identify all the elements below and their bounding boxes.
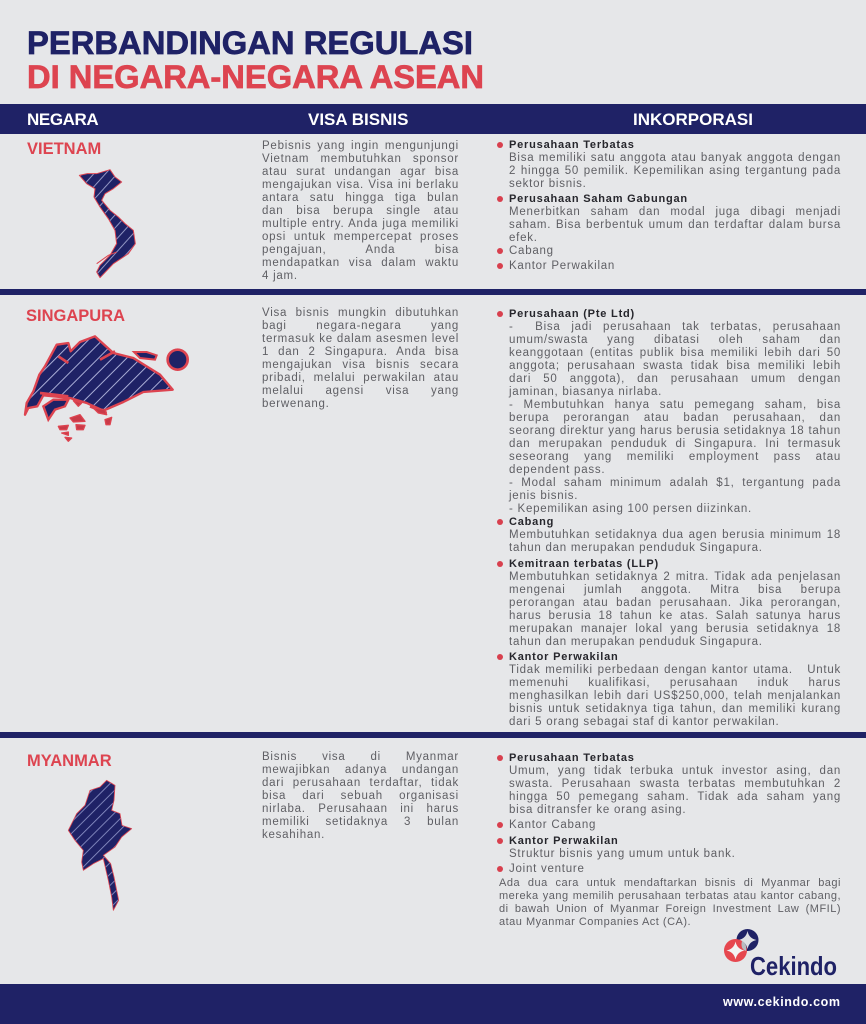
text: Singapore incorporation: - Membutuhkan hanya satu pemegang saham, bisa (509, 399, 841, 411)
text: Singapore incorporation: dependent pass. (509, 464, 605, 476)
text: Vietnam incorporation: Menerbitkan saham dan modal juga dibagi menjadi (509, 206, 841, 218)
panel: Singapura (24, 307, 841, 728)
divider bar (0, 732, 866, 738)
text: Singapore business visa: melalui agensi visa yang (262, 385, 459, 397)
text: Singapore incorporation: - Bisa jadi perusahaan tak terbatas, perusahaan (509, 321, 841, 333)
text: Vietnam business visa: Pebisnis yang ingin mengunjungi (262, 140, 459, 152)
text: Singapore incorporation: Kantor Perwakilan (509, 651, 619, 663)
icon: map of Singapore (24, 335, 189, 442)
text: Vietnam business visa: mendapatkan visa dalam waktu (262, 257, 459, 269)
text: Vietnam incorporation: efek. (509, 232, 538, 244)
text: Singapore business visa: Visa bisnis mungkin dibutuhkan (262, 307, 459, 319)
country name: Singapura: SINGAPURA (26, 307, 125, 325)
text: Vietnam business visa: dan bisa berupa single atau (262, 205, 459, 217)
text: Myanmar incorporation: Umum, yang tidak terbuka untuk investor asing, dan (509, 765, 841, 777)
text: Singapore incorporation: Perusahaan (Pte Ltd) (509, 308, 635, 320)
text: Singapore incorporation: Membutuhkan setidaknya 2 mitra. Tidak ada penjelasan (509, 571, 841, 583)
text: Myanmar business visa: bisa dari sebuah organisasi (262, 790, 459, 802)
text: Singapore incorporation: menghasilkan lebih dari US$250,000, telah menjalankan (509, 690, 841, 702)
text: Vietnam business visa: Vietnam membutuhkan sponsor (262, 153, 459, 165)
text: Singapore incorporation: harus berusia 18 tahun ke atas. Salah satunya harus (509, 610, 841, 622)
text: Myanmar registration note: Ada dua cara untuk mendaftarkan bisnis di Myanmar bagi (499, 877, 841, 889)
text: Myanmar incorporation: bisa ditransfer ke orang asing. (509, 804, 686, 816)
icon: interlocking rings (724, 929, 758, 962)
text: Singapore incorporation: memenuhi kualifikasi, perusahaan induk harus (509, 677, 841, 689)
text: Singapore incorporation: dari 5 orang sebagai staf di kantor perwakilan. (509, 716, 780, 728)
text: Singapore incorporation: keanggotaan (entitas publik bisa memiliki lebih dari 50 (509, 347, 841, 359)
text: Vietnam incorporation: Perusahaan Saham Gabungan (509, 193, 688, 205)
text: Vietnam business visa: multiple entry. Anda juga memiliki (262, 218, 459, 230)
text: Singapore incorporation: berupa perorangan atau badan perusahaan, dan (509, 412, 841, 424)
panel: Vietnam (27, 139, 841, 282)
text: Myanmar incorporation: Kantor Perwakilan (509, 835, 619, 847)
text: Vietnam incorporation: Perusahaan Terbatas (509, 139, 635, 151)
text: Myanmar registration note (499, 877, 841, 928)
text: Myanmar business visa: nirlaba. Perusahaan ini harus (262, 803, 459, 815)
text: Vietnam business visa (262, 140, 459, 282)
text: Vietnam incorporation: saham. Bisa berbentuk umum dan terdaftar dalam bursa (509, 219, 841, 231)
text: Singapore incorporation: tahun dan merupakan penduduk Singapura. (509, 636, 763, 648)
text: Singapore incorporation: Cabang (509, 516, 554, 528)
column heading: negara: NEGARA (27, 110, 98, 129)
text: Myanmar business visa: memiliki setidaknya 3 bulan (262, 816, 459, 828)
text: Myanmar business visa: mewajibkan adanya undangan (262, 764, 459, 776)
text: Vietnam incorporation: Kantor Perwakilan (509, 260, 615, 272)
icon: map of Myanmar (68, 780, 132, 911)
text: Singapore business visa: 1 dan 2 Singapura. Anda bisa (262, 346, 459, 358)
text: Myanmar registration note: mereka yang memilih perusahaan terbatas atau kantor cabang, (499, 890, 841, 902)
panel: Myanmar (27, 751, 841, 928)
text: Singapore incorporation: dari 50 anggota), dan perusahaan umum dengan (509, 373, 841, 385)
text: Myanmar registration note: atau Myanmar Companies Act (CA). (499, 916, 691, 928)
text: Singapore incorporation: Kemitraan terbatas (LLP) (509, 558, 659, 570)
text: Vietnam business visa: opsi untuk mempercepat proses (262, 231, 459, 243)
text: Myanmar business visa: kesahihan. (262, 829, 325, 841)
column heading: inkorporasi: INKORPORASI (633, 110, 753, 129)
text: Singapore incorporation (497, 308, 841, 728)
text: Vietnam incorporation (497, 139, 841, 272)
text: Myanmar incorporation: Struktur bisnis yang umum untuk bank. (509, 848, 736, 860)
text: Singapore incorporation: seseorang yang memiliki employment pass atau (509, 451, 841, 463)
text: Vietnam business visa: mengajukan visa. Visa ini berlaku (262, 179, 459, 191)
country name: Vietnam: VIETNAM (27, 140, 101, 158)
text: Singapore incorporation: mengenai jumlah anggota. Mitra bisa berupa (509, 584, 841, 596)
text: Myanmar incorporation: Joint venture (509, 863, 585, 875)
text: Singapore incorporation: tahun dan merupakan penduduk Singapura. (509, 542, 763, 554)
text: Singapore incorporation: Membutuhkan setidaknya dua agen berusia minimum 18 (509, 529, 841, 541)
text: Singapore incorporation: - Modal saham minimum adalah $1, tergantung pada (509, 477, 841, 489)
text: Vietnam business visa: atau surat undangan agar bisa (262, 166, 459, 178)
text: Vietnam business visa: pengajuan, Anda bisa (262, 244, 459, 256)
text: Vietnam incorporation: sektor bisnis. (509, 178, 587, 190)
text: Singapore business visa: termasuk ke dalam asesmen level (262, 333, 459, 345)
text: Singapore incorporation: umum/swasta yang dibatasi oleh saham dan (509, 334, 841, 346)
text: Myanmar incorporation: Perusahaan Terbatas (509, 752, 635, 764)
text: Myanmar incorporation: swasta. Perusahaan swasta terbatas membutuhkan 2 (509, 778, 841, 790)
text: Myanmar registration note: di bawah Union of Myanmar Foreign Investment Law (MFIL) (499, 903, 841, 915)
country name: Myanmar: MYANMAR (27, 752, 112, 770)
text: Singapore incorporation: dan merupakan penduduk di Singapura. Ini termasuk (509, 438, 841, 450)
text: Vietnam business visa: 4 jam. (262, 270, 298, 282)
text: Singapore incorporation: jenis bisnis. (509, 490, 578, 502)
text: Singapore incorporation: - Kepemilikan asing 100 persen diizinkan. (509, 503, 752, 515)
text: Vietnam incorporation: 2 hingga 50 pemilik. Kepemilikan asing tergantung pada (509, 165, 841, 177)
icon: map of Vietnam (78, 169, 136, 278)
text: Singapore business visa: berwenang. (262, 398, 330, 410)
text: Myanmar business visa: Bisnis visa di Myanmar (262, 751, 459, 763)
title (27, 25, 484, 95)
footer bar (0, 984, 866, 1024)
text: Singapore incorporation: jaminan, biasanya nirlaba. (509, 386, 662, 398)
divider bar (0, 289, 866, 295)
text: Singapore incorporation: bisnis untuk setidaknya tiga tahun, dan memiliki kurang (509, 703, 841, 715)
text: Myanmar incorporation: Kantor Cabang (509, 819, 596, 831)
text: Singapore business visa: mengajukan visa bisnis secara (262, 359, 459, 371)
text: Myanmar incorporation: hingga 50 pemegang saham. Tidak ada saham yang (509, 791, 841, 803)
title: PERBANDINGAN REGULASI (27, 25, 473, 61)
text: Myanmar business visa: dari perusahaan terdaftar, tidak (262, 777, 459, 789)
text: Vietnam incorporation: Cabang (509, 245, 554, 257)
text: Singapore incorporation: seorang direktur yang harus berusia setidaknya 18 tahun (509, 425, 841, 437)
text: Myanmar incorporation (497, 752, 841, 875)
column heading: visa bisnis: VISA BISNIS (308, 110, 408, 129)
text: Singapore incorporation: anggota; perusahaan swasta tidak bisa memiliki lebih (509, 360, 841, 372)
text: Singapore business visa (262, 307, 459, 410)
logo: Cekindo (724, 929, 837, 981)
text: Singapore incorporation: perorangan atau badan perusahaan. Jika perorangan, (509, 597, 841, 609)
text: Myanmar business visa (262, 751, 459, 841)
wordmark: Cekindo (750, 951, 837, 981)
text: Vietnam business visa: antara satu hingga tiga bulan (262, 192, 459, 204)
title: DI NEGARA-NEGARA ASEAN (27, 59, 484, 95)
text: Singapore business visa: bagi negara-negara yang (262, 320, 459, 332)
text: Singapore incorporation: Tidak memiliki perbedaan dengan kantor utama. Untuk (509, 664, 841, 676)
table header bar (0, 104, 866, 134)
website url: www.cekindo.com (723, 995, 841, 1009)
text: Vietnam incorporation: Bisa memiliki satu anggota atau banyak anggota dengan (509, 152, 841, 164)
text: Singapore business visa: pribadi, melalui perwakilan atau (262, 372, 459, 384)
text: Singapore incorporation: merupakan manajer lokal yang berusia setidaknya 18 (509, 623, 841, 635)
